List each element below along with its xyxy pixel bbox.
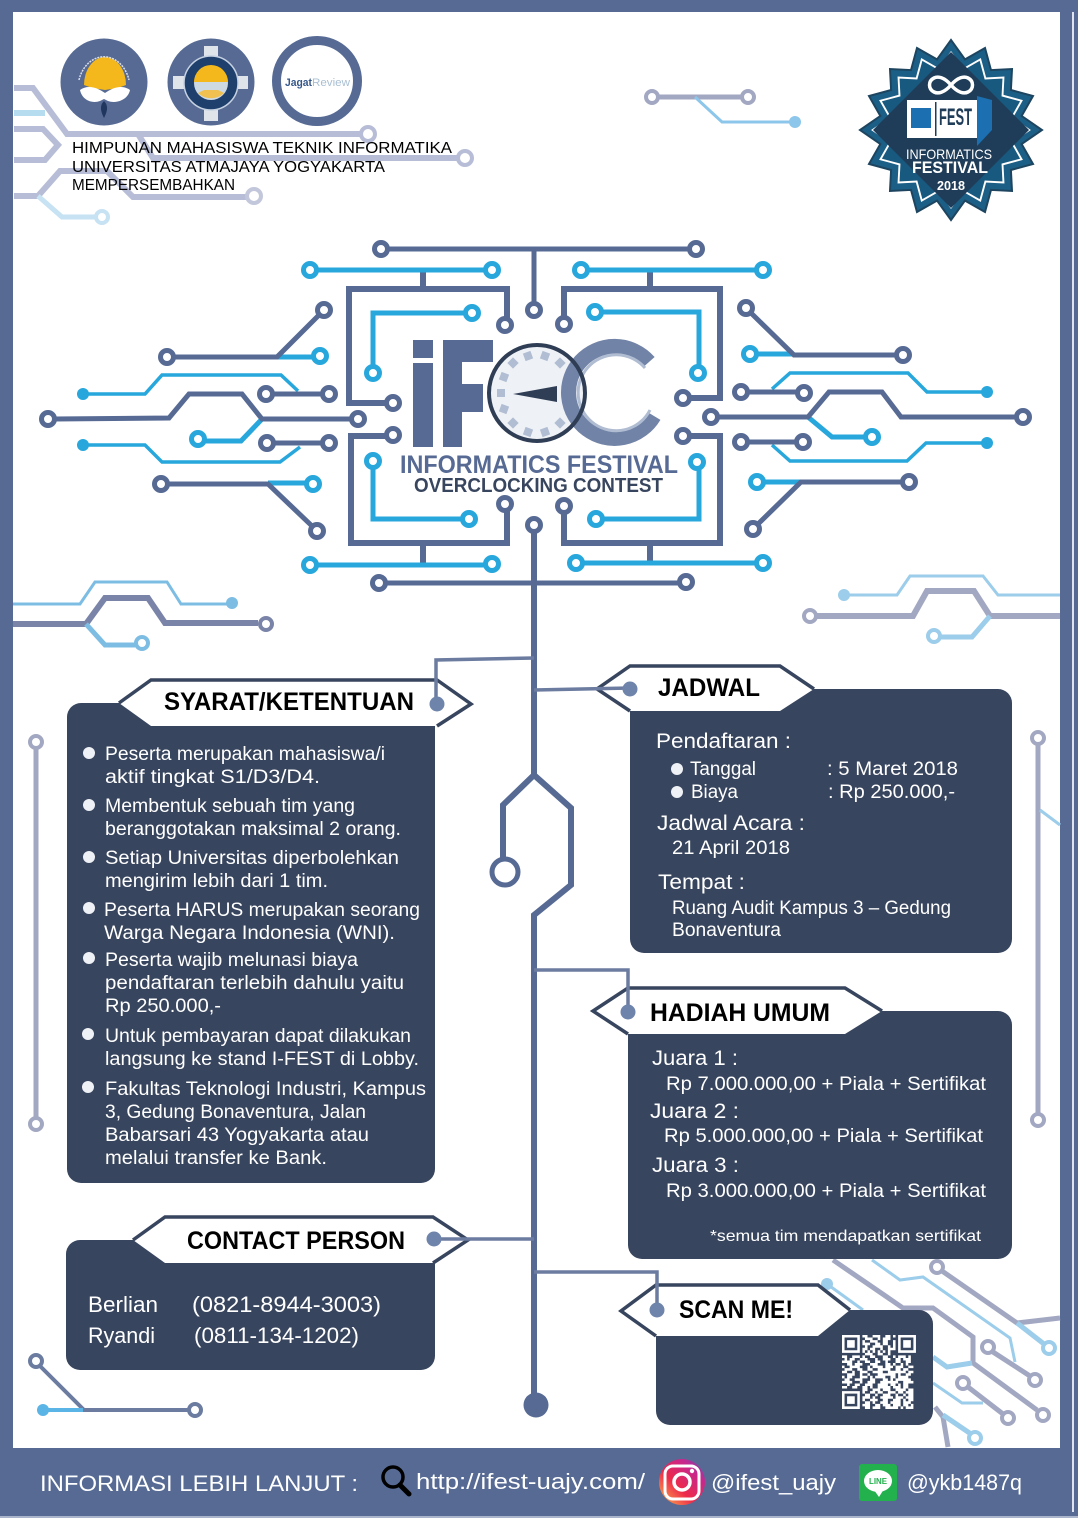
icon: line — [859, 1464, 897, 1501]
footer: label: INFORMASI LEBIH LANJUT : — [40, 1471, 358, 1496]
icon: jagat review logo — [276, 40, 358, 122]
text: prize list: *semua tim mendapatkan sertifikat — [710, 1228, 982, 1245]
heading: syarat/ketentuan: SYARAT/KETENTUAN — [164, 688, 414, 716]
heading: contact person: CONTACT PERSON — [187, 1227, 405, 1255]
background circuit: left vertical — [30, 736, 42, 1130]
heading: organiser text: MEMPERSEMBAHKAN — [72, 177, 235, 194]
background circuit: mid right — [804, 576, 1060, 642]
heading: scan me: SCAN ME! — [679, 1296, 793, 1324]
text: contacts: Berlian — [88, 1292, 158, 1317]
text: prize list: Rp 7.000.000,00 + Piala + Sertifikat — [666, 1074, 987, 1095]
heading: organiser text — [72, 140, 453, 194]
text: syarat list: Warga Negara Indonesia (WNI). — [104, 923, 395, 944]
trunk line — [492, 518, 571, 1418]
panel: jadwal — [534, 666, 1012, 953]
text: prize list: Rp 3.000.000,00 + Piala + Sertifikat — [666, 1181, 987, 1202]
text: prize list: Juara 3 : — [652, 1154, 739, 1177]
background circuit: top left — [14, 88, 472, 223]
text: syarat list: langsung ke stand I-FEST di Lobby. — [105, 1049, 419, 1070]
text: prize list: Juara 2 : — [650, 1100, 739, 1123]
text: syarat list: mengirim lebih dari 1 tim. — [105, 871, 328, 892]
icon: instagram — [659, 1459, 705, 1505]
text: contacts: (0821-8944-3003) — [192, 1292, 381, 1317]
icon: himpunan logo — [168, 38, 254, 126]
icon: informatics festival badge: FESTIVAL — [912, 158, 988, 177]
panel: scan me — [534, 1272, 933, 1425]
background circuit: bottom left — [30, 1355, 201, 1416]
text: prize list: Rp 5.000.000,00 + Piala + Sertifikat — [664, 1126, 984, 1147]
icon: informatics festival badge: INFORMATICS — [906, 146, 992, 162]
icon: jagat review logo: Review — [312, 77, 350, 89]
background circuit: mid left — [13, 582, 272, 649]
circuit: left wing — [42, 304, 364, 538]
panel: contact person — [66, 1217, 534, 1370]
logo text: overclocking contest: OVERCLOCKING CONTEST — [414, 475, 663, 497]
text: syarat list: aktif tingkat S1/D3/D4. — [105, 767, 320, 788]
logo: iFOC — [413, 340, 654, 447]
text: jadwal details: 21 April 2018 — [672, 838, 790, 859]
text: syarat list: Rp 250.000,- — [105, 996, 221, 1017]
heading: organiser text: HIMPUNAN MAHASISWA TEKNIK INFORMATIKA — [72, 140, 453, 157]
panel: syarat dan ketentuan — [67, 658, 534, 1183]
text: contacts: Ryandi — [88, 1323, 155, 1348]
background circuit: right vertical — [1032, 732, 1060, 1126]
icon: informatics festival badge — [860, 40, 1042, 220]
text: prize list: Juara 1 : — [652, 1047, 738, 1070]
text: jadwal details: : Rp 250.000,- — [828, 782, 955, 803]
background circuit: bottom right — [821, 1260, 1060, 1447]
text: contacts — [88, 1292, 381, 1348]
icon: line: LINE — [869, 1477, 888, 1486]
circuit: lower left chip corner — [304, 428, 512, 572]
text: jadwal details — [656, 730, 958, 941]
text: prize list — [650, 1047, 987, 1245]
circuit: right wing — [704, 302, 1030, 536]
background circuit: top centre — [646, 91, 801, 128]
text: jadwal details: Ruang Audit Kampus 3 – Gedung — [672, 898, 951, 919]
text: syarat list: pendaftaran terlebih dahulu yaitu — [105, 973, 404, 994]
text: jadwal details: Tempat : — [658, 871, 745, 894]
logo text: informatics festival: INFORMATICS FESTIVAL — [400, 451, 678, 479]
heading: hadiah umum: HADIAH UMUM — [650, 999, 830, 1027]
circuit: upper left chip corner — [304, 264, 512, 410]
footer: line handle: @ykb1487q — [907, 1470, 1022, 1495]
text: syarat list: Fakultas Teknologi Industri, Kampus — [105, 1079, 426, 1100]
icon: qr code — [842, 1335, 916, 1409]
text: jadwal details: Jadwal Acara : — [657, 812, 805, 835]
footer: instagram handle: @ifest_uajy — [711, 1470, 836, 1495]
text: syarat list: Peserta wajib melunasi biaya — [105, 950, 358, 971]
text: syarat list: melalui transfer ke Bank. — [105, 1148, 327, 1169]
text: syarat list — [104, 744, 426, 1169]
text: syarat list: Babarsari 43 Yogyakarta atau — [105, 1125, 369, 1146]
text: syarat list: beranggotakan maksimal 2 orang. — [105, 819, 401, 840]
circuit: top of iFOC chip — [374, 242, 702, 316]
text: jadwal details: Bonaventura — [672, 920, 781, 941]
icon: informatics festival badge: FEST — [939, 104, 972, 131]
text: syarat list: Membentuk sebuah tim yang — [105, 796, 355, 817]
heading: jadwal: JADWAL — [658, 674, 760, 702]
heading: organiser text: UNIVERSITAS ATMAJAYA YOGYAKARTA — [72, 159, 386, 176]
circuit: lower right chip corner — [558, 430, 770, 570]
circuit: upper right chip corner — [558, 264, 770, 404]
icon: magnifier — [383, 1467, 409, 1494]
bullets — [82, 747, 95, 1093]
text: syarat list: Peserta HARUS merupakan seorang — [104, 900, 420, 921]
text: syarat list: Untuk pembayaran dapat dilakukan — [105, 1026, 411, 1047]
text: jadwal details: : 5 Maret 2018 — [827, 759, 958, 780]
text: syarat list: Setiap Universitas diperbolehkan — [105, 848, 399, 869]
text: syarat list: 3, Gedung Bonaventura, Jalan — [105, 1102, 366, 1123]
panel: hadiah umum — [534, 970, 1012, 1259]
footer: website url: http://ifest-uajy.com/ — [416, 1469, 646, 1494]
text: jadwal details: Tanggal — [690, 759, 756, 780]
icon: informatics festival badge: 2018 — [937, 178, 965, 193]
icon: university logo — [60, 38, 148, 126]
text: syarat list: Peserta merupakan mahasiswa/i — [105, 744, 385, 765]
text: jadwal details: Biaya — [691, 782, 738, 803]
icon: jagat review logo: Jagat — [285, 77, 312, 89]
circuit: bottom of chip — [372, 576, 692, 590]
text: jadwal details: Pendaftaran : — [656, 730, 791, 753]
text: contacts: (0811-134-1202) — [194, 1323, 359, 1348]
